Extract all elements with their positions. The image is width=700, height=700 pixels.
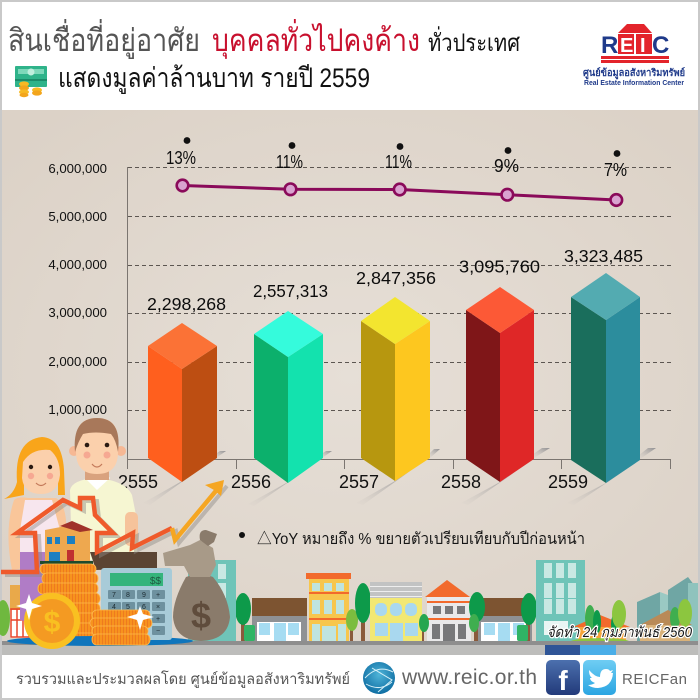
y axis labels	[48, 161, 107, 417]
trees	[469, 592, 537, 641]
ground	[7, 636, 193, 646]
calculator: −	[156, 628, 160, 635]
YoY percentage labels: 9%	[494, 156, 519, 176]
YoY percentage labels: 11%	[276, 152, 303, 172]
chart	[48, 137, 671, 506]
logo: REIC: C	[652, 32, 669, 59]
YoY percentage labels: 7%	[604, 160, 627, 180]
background small building	[0, 585, 30, 638]
calculator: 9	[142, 592, 146, 599]
calculator: 7	[112, 592, 116, 599]
y axis labels: 2,000,000	[48, 354, 107, 369]
man	[69, 418, 138, 560]
title line 1 end: ทั่วประเทศ	[428, 26, 520, 57]
shop row left	[252, 598, 307, 641]
subtitle: แสดงมูลค่าล้านบาท รายปี 2559	[58, 63, 370, 94]
calculator: 8	[126, 592, 130, 599]
trees	[346, 583, 371, 641]
woman	[4, 437, 68, 625]
y axis labels: 6,000,000	[48, 161, 107, 176]
calculator	[101, 568, 172, 640]
chart background panel	[2, 110, 698, 641]
logo: REIC: E	[620, 35, 633, 57]
title highlighted: บุคคลทั่วไปคงค้าง	[212, 19, 420, 60]
x axis year labels: 2556	[231, 472, 271, 492]
social colour tabs	[545, 645, 616, 655]
x axis year labels: 2559	[548, 472, 588, 492]
logo: REIC: ศูนย์ข้อมูลอสังหาริมทรัพย์	[583, 67, 685, 80]
icon: globe	[363, 662, 395, 694]
y axis labels: 5,000,000	[48, 209, 107, 224]
calculator: +	[156, 616, 160, 623]
footer credit text: รวบรวมและประมวลผลโดย ศูนย์ข้อมูลอสังหาริมทรัพย์	[16, 670, 350, 688]
bar: 2558	[466, 287, 534, 482]
big dollar coin	[24, 593, 80, 649]
trousers	[90, 552, 157, 570]
people and finance illustration	[0, 418, 236, 649]
bar: 2556	[254, 311, 323, 483]
x axis year labels: 2555	[118, 472, 158, 492]
icon: facebook: f	[558, 665, 568, 696]
calculator: $$	[150, 576, 161, 587]
road	[2, 641, 698, 655]
small coin stack	[90, 610, 152, 645]
social handle: REICFan	[622, 671, 687, 688]
tree	[235, 593, 251, 641]
recycling bins	[244, 625, 528, 641]
bar: 2557	[361, 297, 430, 481]
small houses and bushes	[570, 599, 692, 646]
YoY line series	[177, 180, 622, 206]
building: pale yellow	[370, 582, 422, 641]
calculator: 6	[142, 604, 146, 611]
building: yellow	[306, 573, 351, 641]
grid lines and axes	[127, 167, 671, 469]
money bag and gloved hand: $	[191, 595, 211, 636]
YoY percentage labels: 13%	[166, 148, 196, 168]
big dollar coin: $	[44, 606, 61, 639]
building: white with orange roof	[425, 580, 471, 641]
calculator: ×	[156, 604, 160, 611]
coin stack	[38, 561, 100, 642]
bar value labels	[147, 246, 643, 314]
header band	[2, 2, 698, 110]
house outline arrow	[1, 480, 227, 575]
bar value labels: 2,298,268	[147, 294, 226, 314]
x axis year labels: 2558	[441, 472, 481, 492]
bar: 2555	[148, 323, 217, 482]
title line 1: สินเชื่อที่อยู่อาศัย	[8, 19, 200, 59]
logo: REIC: R	[601, 32, 618, 59]
distant buildings	[637, 577, 698, 641]
bar value labels: 3,095,760	[459, 256, 540, 276]
footer band	[2, 655, 698, 698]
x axis year labels: 2557	[339, 472, 379, 492]
bar value labels: 2,557,313	[253, 281, 328, 301]
YoY percentage labels	[166, 137, 627, 180]
logo: REIC	[583, 24, 685, 87]
money bag and gloved hand	[163, 530, 230, 641]
sparkles	[16, 594, 154, 630]
calculator: 5	[126, 604, 130, 611]
bar value labels: 3,323,485	[564, 246, 643, 266]
y axis labels: 4,000,000	[48, 257, 107, 272]
y axis labels: 1,000,000	[48, 402, 107, 417]
calculator: 4	[112, 604, 116, 611]
small tree	[419, 614, 429, 641]
icon: banknotes and coins	[15, 66, 47, 97]
logo: REIC: Real Estate Information Center	[584, 80, 684, 87]
footnote: △YoY หมายถึง % ขยายตัวเปรียบเทียบกับปีก่อนหน้า	[257, 530, 585, 548]
website url: www.reic.or.th	[401, 666, 537, 689]
shop row right	[478, 598, 532, 641]
bar value labels: 2,847,356	[356, 268, 436, 288]
icon: facebook	[546, 660, 580, 696]
logo: REIC: I	[640, 35, 646, 57]
y axis labels: 3,000,000	[48, 305, 107, 320]
small house	[45, 521, 93, 563]
street scene	[235, 560, 698, 646]
x axis year labels	[118, 472, 588, 492]
building: teal right	[536, 560, 585, 641]
icon: twitter	[583, 660, 616, 695]
bar: 2559	[571, 273, 640, 483]
calculator: +	[156, 592, 160, 599]
YoY percentage labels: 11%	[385, 152, 412, 172]
bar shadows	[143, 448, 656, 506]
teal building behind bag	[188, 560, 236, 641]
